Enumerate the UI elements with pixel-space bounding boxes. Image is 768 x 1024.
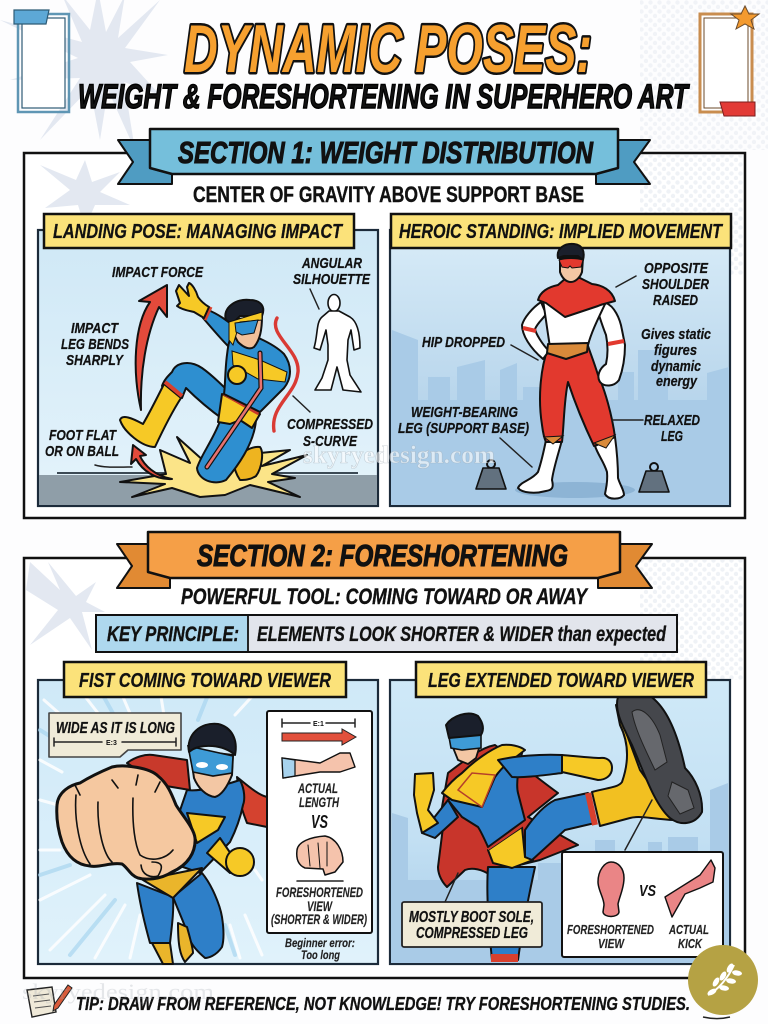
boot sole callout <box>402 902 542 947</box>
decorative frame: top left <box>14 10 69 112</box>
comparison inset: (SHORTER & WIDER) <box>271 911 367 927</box>
panel: landing pose <box>38 214 378 506</box>
section 2 subheading: POWERFUL TOOL: COMING TOWARD OR AWAY <box>181 584 589 609</box>
landing pose labels: SILHOUETTE <box>293 271 371 288</box>
wide as it is long callout: E:3 <box>106 740 117 747</box>
landing pose labels: FOOT FLAT <box>49 427 117 444</box>
section 1 ribbon <box>118 129 650 184</box>
landing pose labels: IMPACT FORCE <box>112 265 204 281</box>
foreshortened fist icon <box>297 836 343 881</box>
red center line of action <box>207 353 261 467</box>
shadow under feet <box>515 482 635 498</box>
kick comparison inset: FORESHORTENED <box>567 922 654 937</box>
heroic standing label bar <box>391 214 731 248</box>
panel: leg extended toward viewer <box>390 662 730 964</box>
heroic labels: HIP DROPPED <box>422 334 505 351</box>
kick pointers <box>445 800 652 902</box>
heroic labels: SHOULDER <box>642 276 709 293</box>
watermark lower: skyryedesign.com <box>22 979 214 1004</box>
heroic labels: dynamic <box>651 358 702 375</box>
watermark: skyryedesign.com <box>303 442 495 469</box>
landing pose labels: SHARPLY <box>66 352 125 369</box>
angular silhouette icon <box>314 294 361 392</box>
heroic labels: LEG (SUPPORT BASE) <box>398 420 529 437</box>
giant foreshortened fist <box>57 766 195 879</box>
sole icon <box>598 862 624 916</box>
panel: heroic standing <box>390 214 731 506</box>
beginner error note <box>285 936 355 962</box>
beginner error note: Beginner error: <box>285 936 355 950</box>
comparison inset: LENGTH <box>299 794 340 810</box>
speed rays <box>40 690 262 958</box>
landing pose labels: S-CURVE <box>303 433 358 450</box>
landing pose labels: ANGULAR <box>301 255 362 272</box>
comparison inset: VIEW <box>307 898 333 914</box>
kick label bar: LEG EXTENDED TOWARD VIEWER <box>428 670 694 692</box>
kick comparison inset: VS <box>639 883 656 900</box>
impact force arrow <box>136 285 167 410</box>
compressed s-curve line <box>274 318 298 431</box>
boot sole callout: MOSTLY BOOT SOLE, <box>409 909 534 926</box>
heroic labels: figures <box>654 342 697 359</box>
section 2 heading: SECTION 2: FORESHORTENING <box>197 538 568 573</box>
heroic labels: WEIGHT-BEARING <box>411 404 518 421</box>
actual kick icon <box>665 860 715 917</box>
key principle bar: KEY PRINCIPLE: <box>107 623 239 646</box>
fist label bar: FIST COMING TOWARD VIEWER <box>79 670 331 692</box>
weight icon left <box>476 460 506 489</box>
landing pose labels <box>45 255 373 460</box>
landing pose pointers <box>95 289 319 467</box>
landing pose label bar: LANDING POSE: MANAGING IMPACT <box>53 221 343 243</box>
heroic labels: Gives static <box>641 326 712 343</box>
weight icon right <box>639 463 669 492</box>
kick hero figure <box>414 691 702 962</box>
heroic labels: energy <box>656 373 698 390</box>
badge: wheat emblem <box>688 945 758 1018</box>
section 1 heading: SECTION 1: WEIGHT DISTRIBUTION <box>178 135 593 170</box>
comparison inset: VS <box>311 812 328 832</box>
heroic labels: OPPOSITE <box>644 260 709 277</box>
heroic labels: RAISED <box>653 292 698 309</box>
key principle bar <box>96 615 677 652</box>
tip icon: scroll and pencil <box>27 985 72 1017</box>
measure arrow <box>282 719 356 745</box>
panel: fist coming toward viewer <box>38 662 378 964</box>
kick comparison inset <box>562 852 723 957</box>
title: DYNAMIC POSES: <box>184 11 592 87</box>
comparison inset: ACTUAL <box>297 780 338 796</box>
panel: section 2 foreshortening <box>24 532 745 978</box>
ground <box>39 473 377 505</box>
panel: section 1 weight distribution <box>24 129 745 518</box>
comparison inset <box>267 711 372 933</box>
heroic labels: RELAXED <box>644 412 700 429</box>
standing hero figure <box>518 244 625 499</box>
heroic labels: LEG <box>661 428 683 445</box>
kick comparison inset: ACTUAL <box>668 922 709 937</box>
measure arrow: E:1 <box>313 721 324 728</box>
kick comparison inset: VIEW <box>598 936 625 951</box>
foot arrow <box>131 445 172 479</box>
landing pose label bar <box>44 214 354 248</box>
landing pose labels: OR ON BALL <box>45 443 119 460</box>
heroic labels <box>398 260 712 445</box>
comparison inset: FORESHORTENED <box>276 884 363 900</box>
kick label bar <box>416 662 706 697</box>
kick panel skyline <box>391 783 729 963</box>
landing pose labels: IMPACT <box>71 320 120 337</box>
section 2 ribbon <box>117 532 652 588</box>
city skyline <box>391 330 729 505</box>
beginner error note: Too long <box>301 948 341 962</box>
decorative frame: top right <box>700 6 759 116</box>
fist label bar <box>64 662 346 697</box>
wide as it is long callout: WIDE AS IT IS LONG <box>56 720 175 737</box>
fist hero figure <box>127 724 267 964</box>
landing hero figure <box>120 283 290 482</box>
kick comparison inset: KICK <box>678 936 703 951</box>
boot sole callout: COMPRESSED LEG <box>416 925 528 942</box>
heroic pointers <box>500 276 643 467</box>
section 1 subheading: CENTER OF GRAVITY ABOVE SUPPORT BASE <box>193 182 584 207</box>
actual length arm icon <box>282 753 355 778</box>
impact burst <box>120 437 307 497</box>
landing pose labels: COMPRESSED <box>287 416 373 433</box>
wide as it is long callout <box>49 713 181 757</box>
landing pose labels: LEG BENDS <box>61 336 129 353</box>
